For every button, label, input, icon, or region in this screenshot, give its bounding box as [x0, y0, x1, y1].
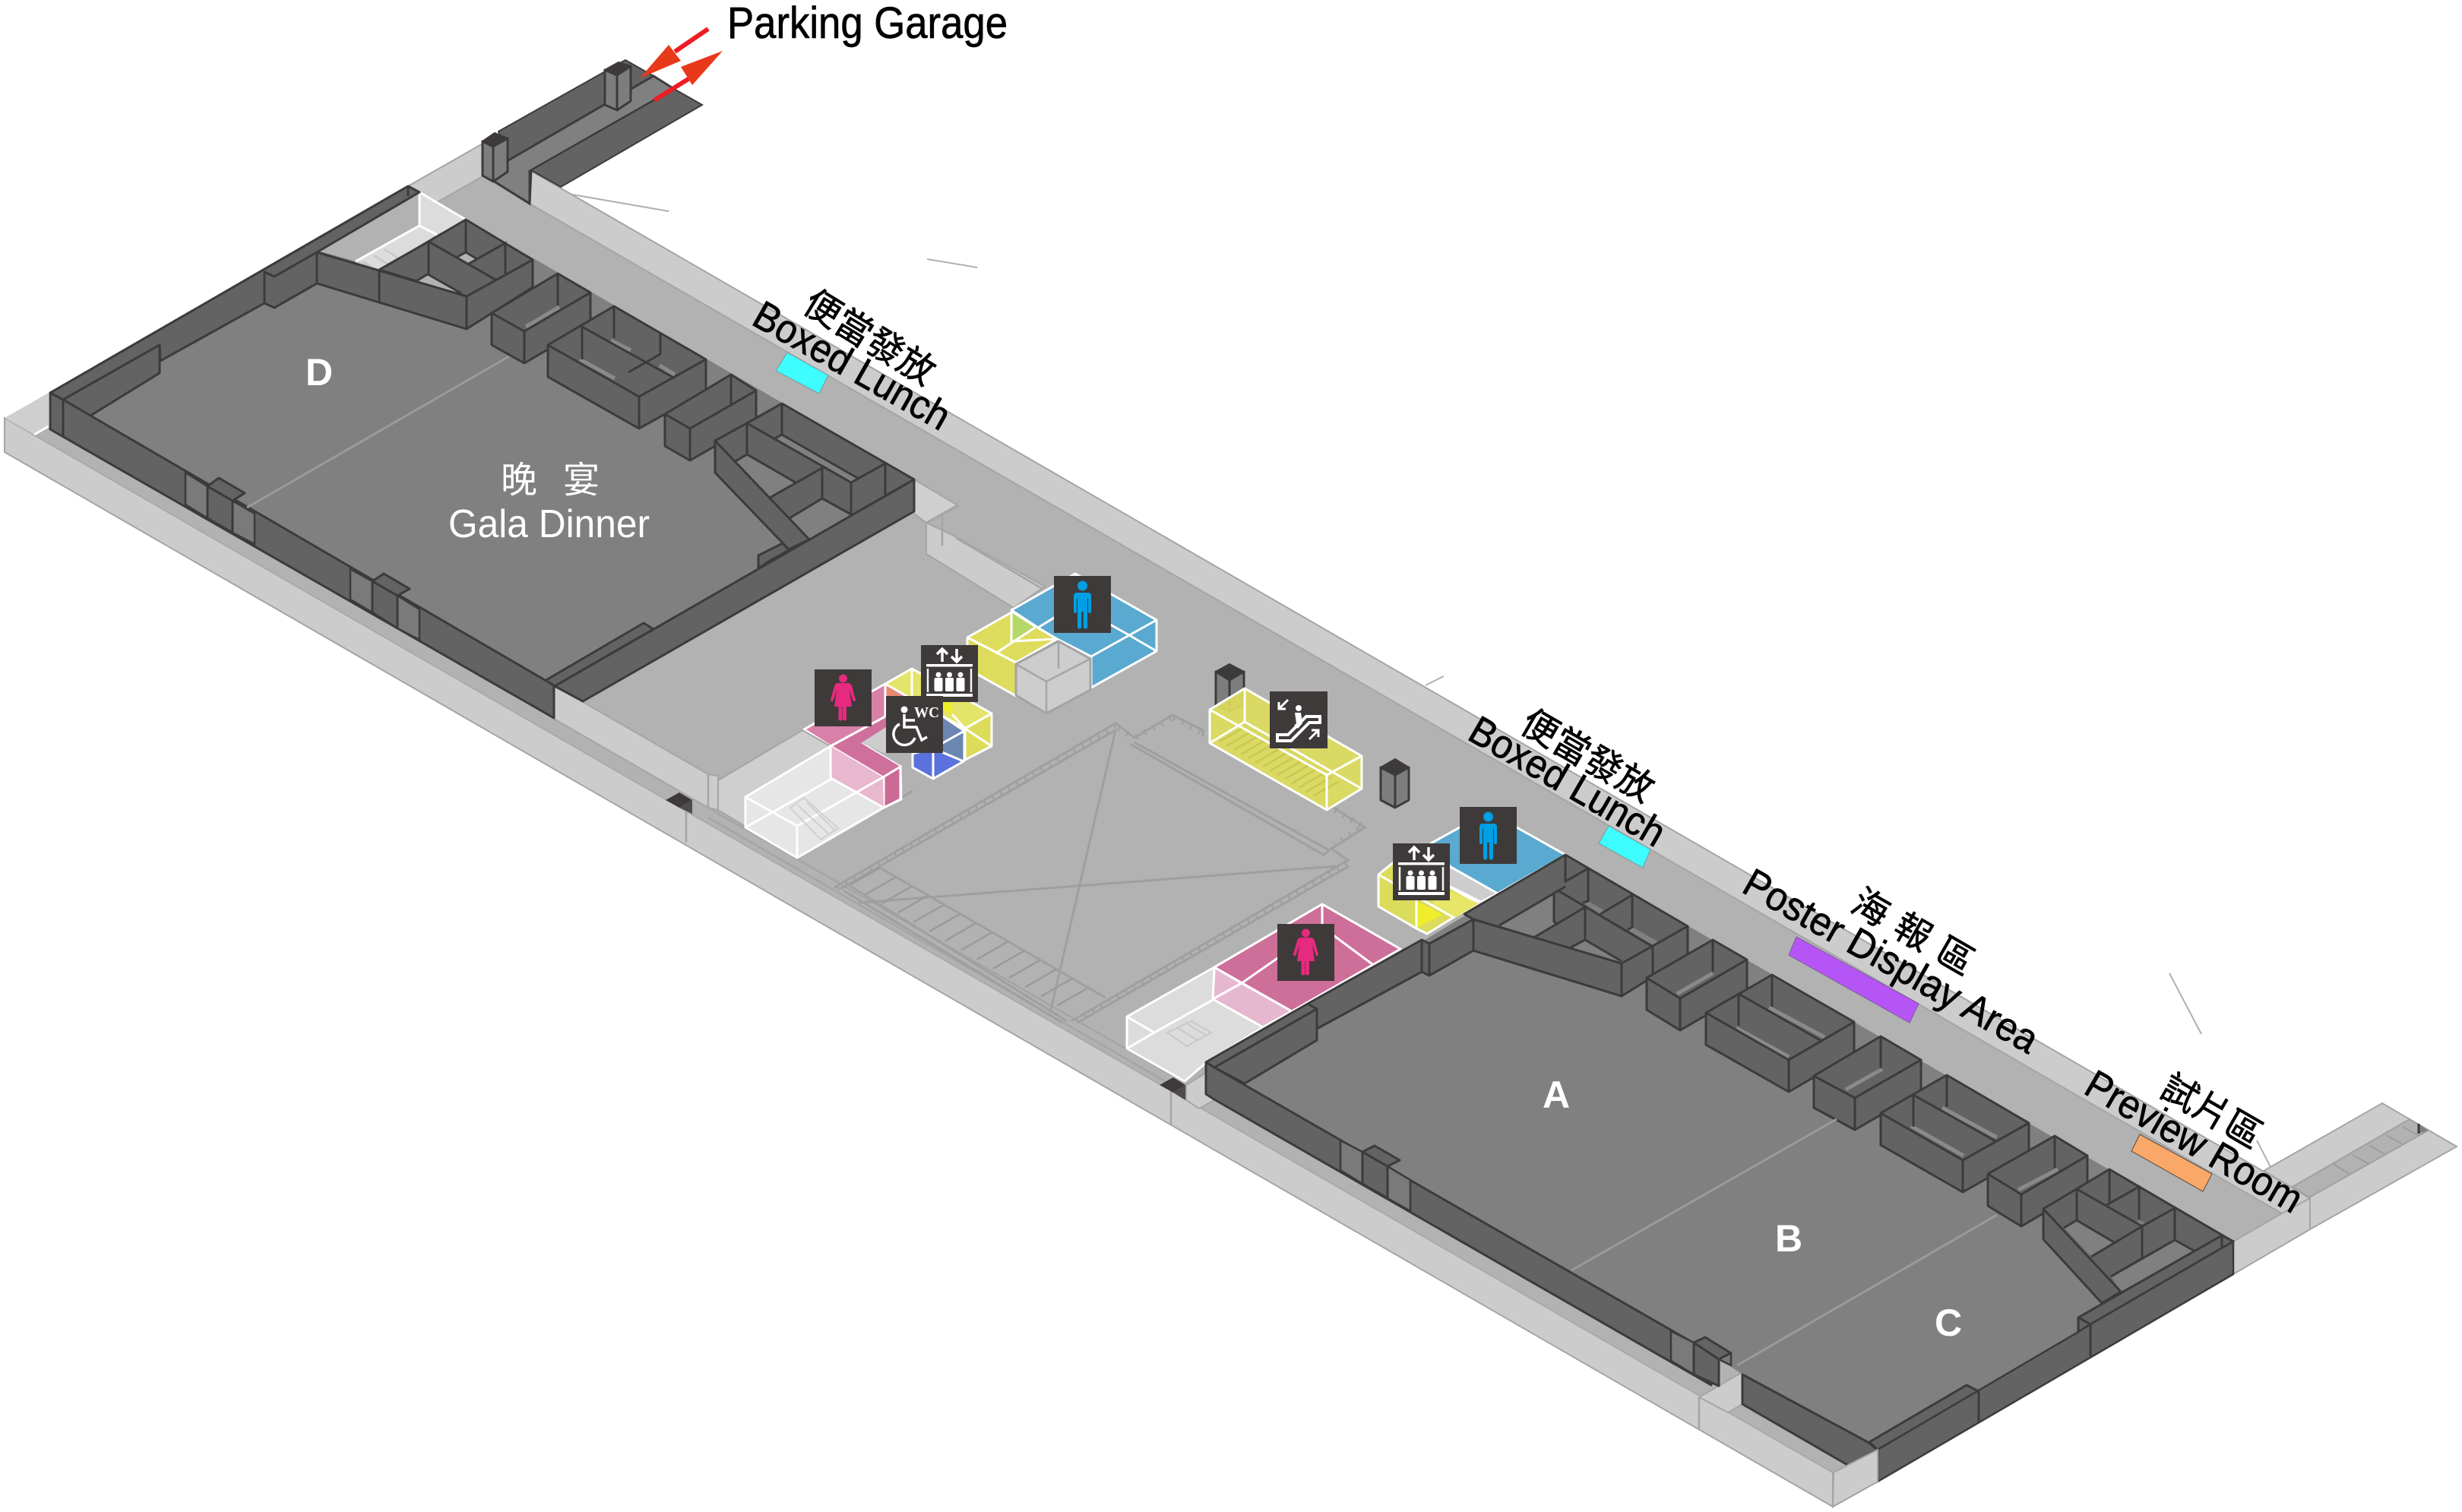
label: boxed lunch 1 english: Boxed Lunch: [745, 293, 958, 439]
label: preview room chinese: 試片區: [2153, 1068, 2269, 1157]
gala hall floor: [63, 192, 914, 686]
men's room zone 1: [1011, 574, 1157, 688]
marker 1: [666, 792, 692, 814]
hall right alcove: [2043, 1169, 2233, 1303]
icon: elevator 2: [1393, 843, 1450, 900]
light corner over hall C: [1833, 1450, 1878, 1507]
marker 2: [1160, 1077, 1185, 1100]
gala back pilaster: [264, 252, 317, 308]
hall right ledge corner: [2078, 1317, 2090, 1332]
men's room zone 2: [1431, 827, 1565, 902]
gala back wall: [50, 186, 419, 400]
icon: accessible WC: WC: [914, 704, 939, 721]
right ramp: [2264, 1103, 2457, 1229]
poster area marker: [1789, 937, 1919, 1023]
atrium stairs: [850, 868, 1087, 1006]
garage column far: [605, 62, 631, 110]
gala slanted wall joint: [378, 270, 380, 302]
label: poster area english: Poster Display Area: [1736, 860, 2046, 1062]
divider A and B: [1571, 1119, 1837, 1270]
label: boxed lunch 1 chinese: 便當發放: [796, 283, 942, 394]
hall left pilaster wall: [1214, 1009, 1317, 1083]
hall D and gala dinner: [50, 186, 914, 718]
gala right wall face: [555, 479, 914, 701]
booth G1: [492, 274, 590, 363]
atrium void: [834, 715, 1365, 1023]
women's room zone 2: [1213, 904, 1400, 1027]
divider B and C: [1737, 1215, 1997, 1365]
label: boxed lunch 2 chinese: 便當發放: [1514, 703, 1660, 811]
red arrow in: [640, 29, 708, 78]
preview room marker: [2131, 1134, 2212, 1191]
main floor: [34, 176, 2282, 1472]
light piece by hall A: [1186, 1068, 1214, 1109]
stray leader lines on white: [572, 195, 2271, 1167]
front light wall strip: [554, 685, 718, 810]
booth G3: [665, 375, 756, 460]
hall slanted wall: [1473, 919, 1622, 996]
upper left light band: [408, 143, 484, 212]
cyan box lunch marker 2: [1599, 826, 1650, 868]
hall letter C: C: [1935, 1302, 1962, 1344]
hall right wall joints: [1979, 1235, 2222, 1423]
booth G2: [548, 306, 706, 429]
escalator zone: [1210, 688, 1362, 810]
icon: elevator 1: [921, 645, 978, 702]
hall right ledge near: [1869, 1385, 1979, 1450]
booth B3: [1814, 1036, 1921, 1130]
hall letter B: B: [1775, 1217, 1802, 1260]
hall door group 2: [1671, 1331, 1731, 1386]
gala divider line: [247, 356, 509, 508]
front slab face: [5, 418, 1833, 1507]
gala door group 1: [185, 473, 255, 544]
hall A B C: [1206, 855, 2233, 1507]
gala front wall face: [50, 393, 554, 718]
hall pilaster line: [1429, 944, 1430, 976]
gala back wall corner mark: [407, 186, 409, 196]
icon: woman 1: [815, 669, 872, 726]
hall pilaster notch: [1308, 1004, 1317, 1009]
booth B4: [1881, 1075, 2029, 1192]
left end slab piece: [5, 393, 49, 435]
label: boxed lunch 2 english: Boxed Lunch: [1461, 707, 1673, 856]
elevator zone 2 yellow: [1378, 859, 1479, 934]
parking garage ramp: [493, 60, 702, 204]
white stair box 2: [1127, 967, 1263, 1081]
booth B1: [1647, 940, 1747, 1030]
gala top alcove: [379, 220, 533, 329]
back wall light band: [530, 170, 2310, 1213]
free-standing column: [1381, 759, 1409, 808]
hall top alcove: [1464, 855, 1688, 996]
icon: accessible WC: [886, 696, 943, 753]
accessible WC zone blue: [913, 715, 964, 779]
hall letter D: D: [305, 351, 333, 394]
gala slanted wall: [317, 252, 467, 329]
front floor edge lines: [686, 808, 1699, 1429]
gala front wall corner line: [62, 400, 64, 436]
women's room zone 1: [804, 684, 912, 808]
hall mid pilaster: [1422, 919, 1473, 976]
white stair box 1: [745, 746, 884, 858]
gala right wall ledge: [545, 623, 653, 686]
right end slab faces: [1833, 1198, 2310, 1507]
gala title chinese: 晚 宴: [501, 460, 600, 501]
gala left pilaster wall: [63, 345, 160, 416]
icon: man 1: [1054, 576, 1111, 633]
light piece between halls: [1699, 1372, 1742, 1412]
label: preview room english: Preview Room: [2078, 1061, 2311, 1222]
icon: escalator: [1270, 691, 1328, 748]
cyan box lunch marker 1: [776, 353, 828, 394]
hall front wall C: [1742, 1374, 1878, 1466]
icon: woman 2: [1277, 924, 1334, 981]
icon: man 2: [1460, 807, 1517, 864]
accessible WC zone yellow: [885, 669, 992, 760]
booth B2: [1706, 975, 1854, 1092]
gala stair opening: [318, 192, 466, 278]
light grey box: [1016, 641, 1090, 713]
light stair box behind white box 1: [718, 730, 831, 827]
hall front wall A B: [1206, 1062, 1711, 1385]
hall floor: [1214, 855, 2233, 1450]
hall back wall: [1206, 940, 1422, 1068]
garage column near: [483, 133, 508, 182]
hall right wall face: [1878, 1242, 2233, 1482]
hall door group 1: [1340, 1140, 1410, 1211]
column behind escalator: [1216, 664, 1244, 711]
gala door group 2: [350, 569, 419, 640]
gala right alcove: [715, 403, 914, 549]
gala title english: Gala Dinner: [448, 502, 650, 546]
hall right ledge far: [2078, 1235, 2233, 1324]
label: poster area chinese: 海報區: [1845, 882, 1980, 984]
gala small right ledge: [758, 543, 789, 568]
elevator zone 1 yellow: [967, 612, 1057, 696]
light box behind men's room: [914, 479, 1045, 608]
red arrow out: [654, 51, 723, 100]
booth B5: [1988, 1136, 2087, 1226]
hall letter A: A: [1543, 1074, 1570, 1116]
